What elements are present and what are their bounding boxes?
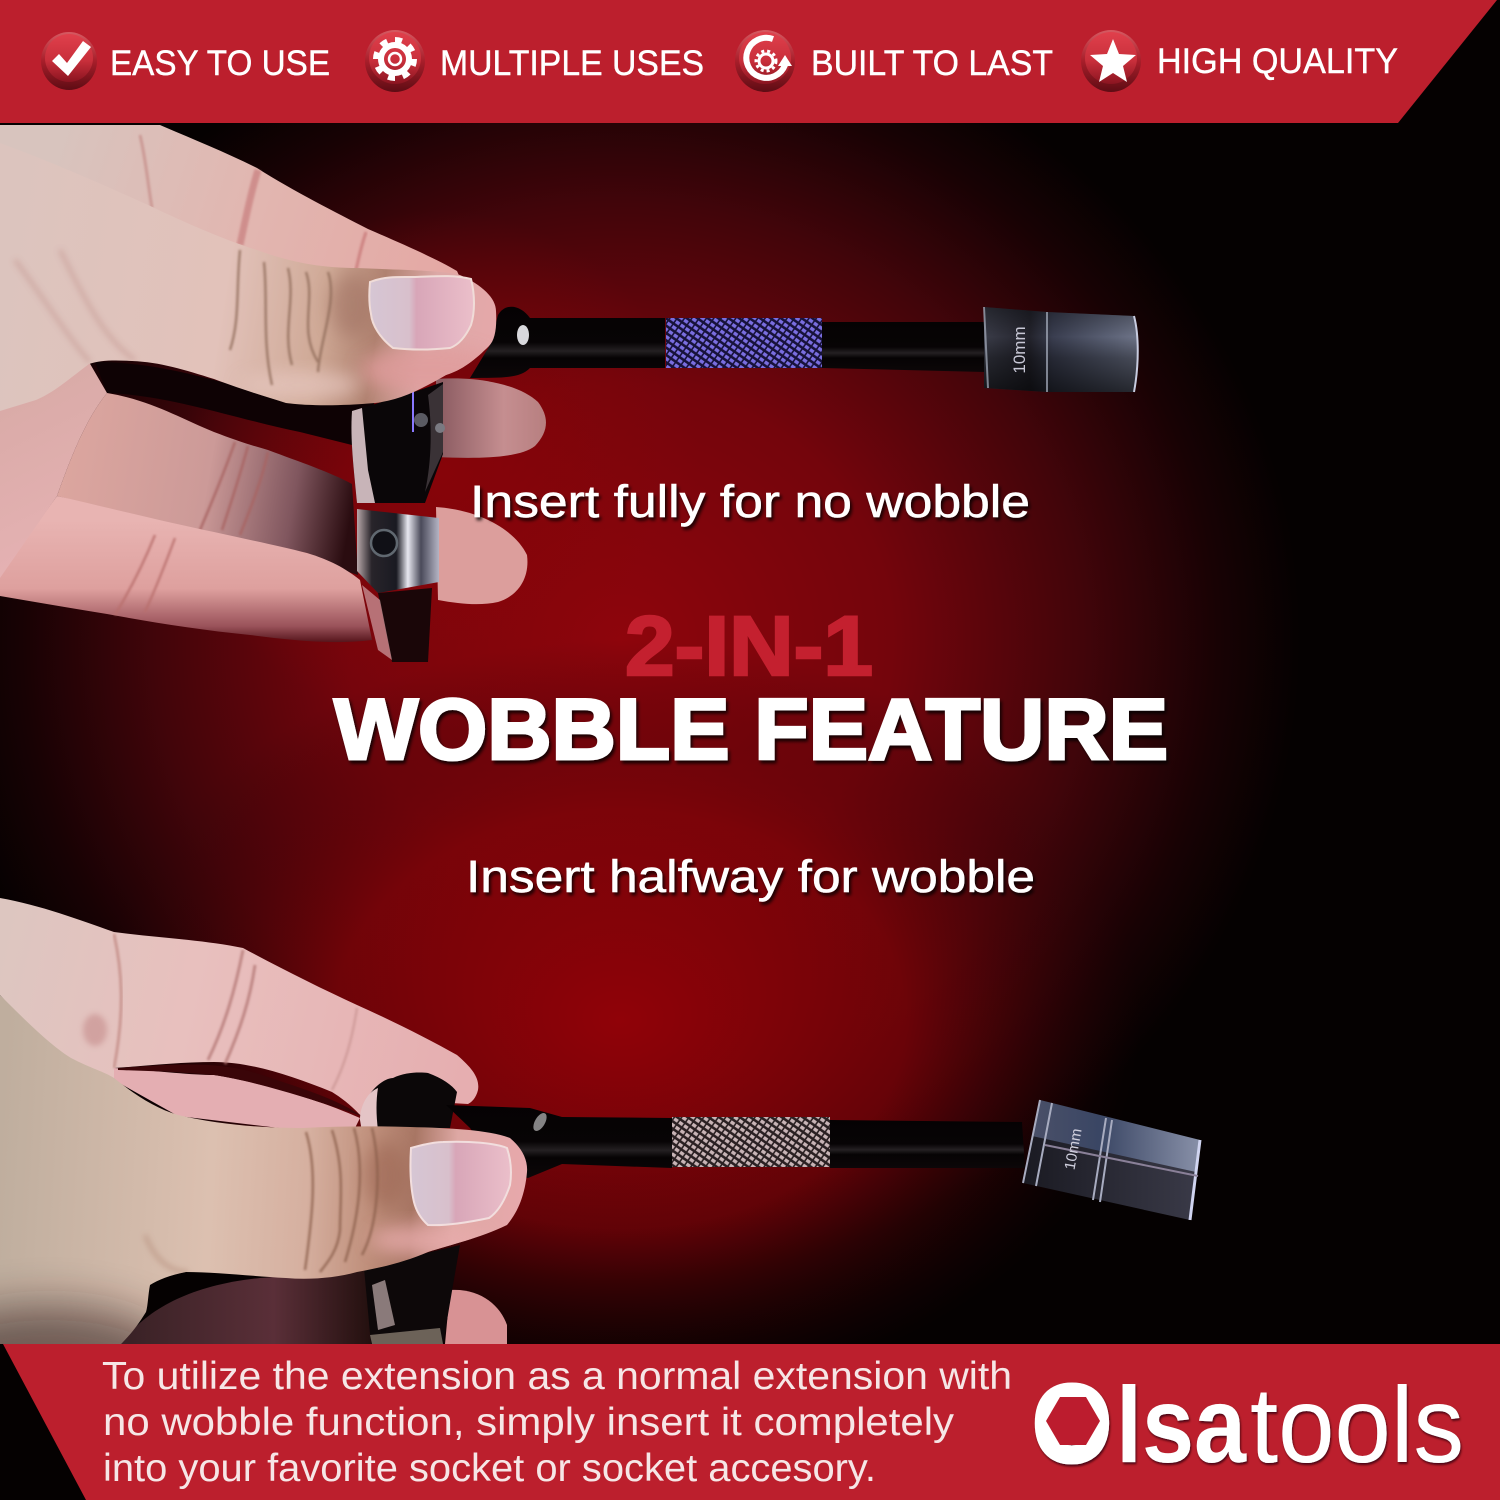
photo: bottom extension tool bbox=[360, 1073, 1200, 1220]
ratchet under thumb bbox=[364, 1245, 460, 1344]
back finger bbox=[0, 125, 470, 300]
thumb nail bbox=[369, 276, 474, 350]
logo: Olsatools: tools bbox=[1250, 1364, 1464, 1485]
logo: Olsatools: lsa bbox=[1116, 1364, 1247, 1485]
photo: top extension tool: 10mm bbox=[1010, 326, 1029, 374]
socket bbox=[984, 307, 1138, 392]
soft shadow at palm base bbox=[0, 1276, 148, 1344]
middle fingertip bbox=[436, 378, 546, 458]
shadow under thumb bbox=[95, 362, 375, 445]
bottom banner bbox=[3, 1344, 1500, 1500]
icon: check mark bbox=[41, 32, 97, 90]
lower light bbox=[240, 371, 360, 399]
sliver finger bbox=[114, 1068, 360, 1130]
index finger bbox=[0, 898, 478, 1115]
label: high quality: HIGH QUALITY bbox=[1157, 42, 1398, 81]
label: built to last: BUILT TO LAST bbox=[811, 44, 1053, 83]
footer text: To utilize the extension as a normal extension with bbox=[102, 1355, 1012, 1398]
middle finger bbox=[57, 393, 358, 575]
ring finger bbox=[0, 496, 372, 642]
socket tilted: 10mm bbox=[1062, 1127, 1086, 1171]
lower shaft bbox=[378, 588, 432, 662]
icon: gear bbox=[365, 30, 425, 92]
photo: top ratchet head bbox=[351, 382, 445, 662]
upper head bbox=[351, 382, 443, 503]
back finger creases bbox=[240, 170, 258, 245]
caption: insert halfway: Insert halfway for wobble bbox=[466, 851, 1035, 902]
lower fingertip bbox=[445, 1290, 507, 1344]
shaft bbox=[446, 1105, 672, 1178]
caption: insert fully: Insert fully for no wobble bbox=[470, 476, 1030, 527]
wrinkles bbox=[230, 250, 331, 385]
photo: bottom hand fingers bbox=[0, 898, 507, 1344]
ring fingertip bbox=[436, 507, 527, 604]
knurled grip bbox=[666, 318, 822, 368]
middle finger knuckle creases bbox=[200, 442, 268, 535]
sliver shadow bbox=[118, 1064, 362, 1116]
photo: top hand fingers behind tool bbox=[0, 125, 546, 642]
socket tilted bbox=[1023, 1100, 1200, 1220]
footer text: into your favorite socket or socket accesory. bbox=[103, 1447, 876, 1490]
thumb tip pink bbox=[360, 346, 500, 394]
logo: Olsatools bbox=[1034, 1364, 1464, 1485]
head bbox=[368, 1073, 457, 1128]
footer text bbox=[102, 1355, 1012, 1490]
title: 2-in-1: 2-IN-1 bbox=[625, 599, 873, 693]
lower chrome joint bbox=[357, 509, 439, 593]
title: wobble feature: WOBBLE FEATURE bbox=[334, 682, 1168, 778]
shaft bbox=[470, 307, 665, 378]
footer text: no wobble function, simply insert it completely bbox=[103, 1401, 955, 1444]
label: multiple uses: MULTIPLE USES bbox=[440, 44, 704, 83]
photo: bottom thumb and palm bbox=[0, 995, 528, 1344]
thumb dark patch bbox=[330, 273, 374, 337]
top banner bbox=[0, 0, 1497, 123]
photo: top thumb bbox=[0, 200, 496, 411]
icon: star bbox=[1081, 30, 1141, 92]
thumb nail bbox=[410, 1142, 511, 1225]
ring finger creases bbox=[115, 535, 175, 615]
logo: Olsatools: O bbox=[1034, 1365, 1110, 1483]
knurled grip bbox=[672, 1117, 830, 1167]
label: easy to use: EASY TO USE bbox=[110, 44, 330, 83]
ball highlight bbox=[517, 325, 529, 345]
palm bbox=[0, 362, 107, 578]
photo: top extension tool bbox=[470, 307, 1138, 392]
dim lower finger bbox=[121, 1270, 375, 1344]
icon: built to last bbox=[735, 30, 795, 92]
index finger creases bbox=[208, 950, 255, 1064]
